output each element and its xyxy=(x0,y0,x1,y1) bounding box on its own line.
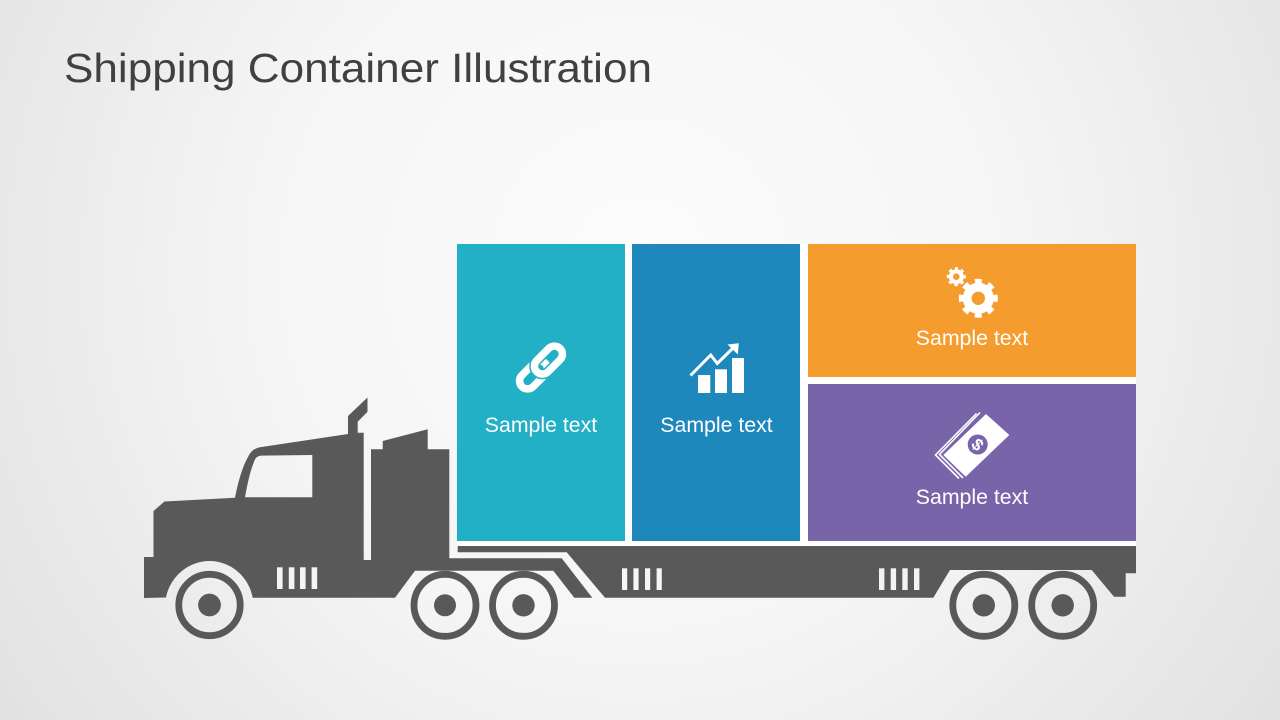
panel: purple container xyxy=(808,384,1136,541)
trailer wheel one xyxy=(953,574,1015,636)
tractor rear wheel one xyxy=(414,574,476,636)
label: Sample text xyxy=(485,413,597,437)
icon: growth chart xyxy=(690,343,744,393)
label: Sample text xyxy=(660,413,773,437)
icon: banknotes: $ xyxy=(967,435,988,455)
cab vents xyxy=(277,567,317,589)
front wheel xyxy=(179,574,240,636)
tractor rear wheel two xyxy=(492,574,554,636)
trailer chassis xyxy=(458,546,1136,598)
panel: blue container xyxy=(632,244,800,541)
icon: chain link xyxy=(516,343,566,392)
icon: banknotes xyxy=(936,412,1009,478)
truck illustration xyxy=(144,398,1136,636)
title: Shipping Container Illustration xyxy=(64,45,652,91)
trailer wheel two xyxy=(1032,574,1094,636)
panel: teal container xyxy=(457,244,625,541)
trailer vents rear xyxy=(879,568,919,590)
trailer vents middle xyxy=(622,568,662,590)
icon: gears xyxy=(948,268,996,316)
panel: orange container xyxy=(808,244,1136,377)
label: Sample text xyxy=(916,485,1028,509)
truck cab and tractor body xyxy=(144,398,592,598)
label: Sample text xyxy=(916,326,1028,350)
